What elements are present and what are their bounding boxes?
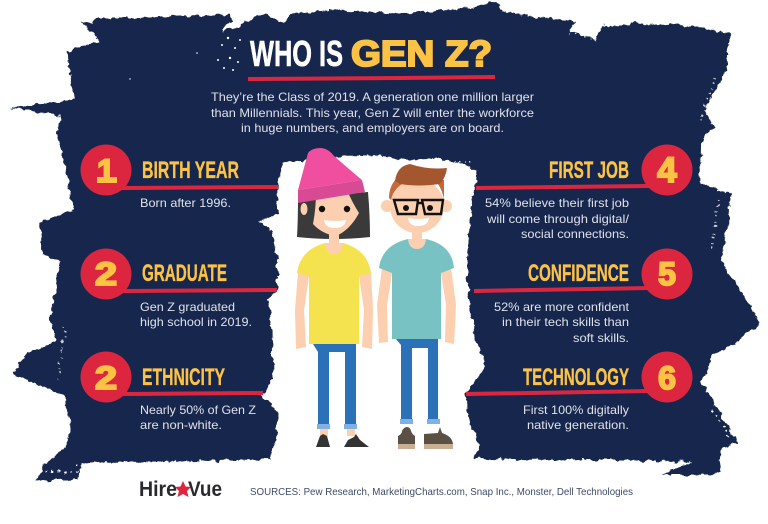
item 3: ethnicity: ETHNICITY bbox=[142, 364, 225, 391]
girl hair back bbox=[297, 192, 370, 239]
item 5: confidence: CONFIDENCE bbox=[528, 260, 629, 287]
boy neck bbox=[408, 230, 426, 249]
item 5: confidence: soft skills. bbox=[573, 331, 629, 345]
item 4: first job: will come through digital/ bbox=[486, 212, 630, 226]
boy boots bbox=[398, 427, 453, 444]
title underline bbox=[248, 75, 495, 81]
boy hair side bbox=[389, 178, 444, 200]
girl shoes bbox=[316, 434, 369, 447]
item 6: technology: native generation. bbox=[527, 418, 629, 432]
item 2: graduate: 2 bbox=[95, 256, 117, 292]
girl smile bbox=[324, 220, 346, 228]
boy glasses bbox=[394, 200, 443, 214]
item 3: ethnicity: Nearly 50% of Gen Z bbox=[140, 403, 256, 417]
item 5: confidence: in their tech skills than bbox=[502, 315, 629, 329]
item 4: first job bbox=[476, 144, 692, 241]
item 3: ethnicity: 2 bbox=[95, 360, 117, 396]
girl legs bbox=[313, 344, 356, 424]
item 5: confidence: 5 bbox=[658, 256, 676, 292]
item 1: birth year bbox=[80, 144, 278, 210]
pink hat bbox=[298, 148, 362, 190]
item 6: technology: First 100% digitally bbox=[523, 403, 629, 417]
item 2: graduate bbox=[80, 248, 277, 329]
boy hair bbox=[395, 164, 447, 186]
hirevue logo bbox=[139, 478, 222, 501]
girl face bbox=[313, 190, 359, 236]
intro paragraph: They’re the Class of 2019. A generation one million larger bbox=[211, 90, 534, 104]
boy legs bbox=[396, 339, 438, 419]
item 5: confidence bbox=[474, 248, 692, 345]
intro paragraph: than Millennials. This year, Gen Z will enter the workforce bbox=[211, 106, 534, 120]
hat band bbox=[298, 180, 365, 203]
title: gen z: GEN Z? bbox=[351, 33, 492, 74]
item 4: first job: FIRST JOB bbox=[549, 157, 629, 184]
item 1: birth year: 1 bbox=[97, 153, 115, 189]
item 4: first job: 4 bbox=[657, 151, 677, 190]
boy arms bbox=[377, 268, 456, 344]
item 3: ethnicity bbox=[80, 352, 263, 432]
item 5: confidence: 52% are more confident bbox=[494, 300, 630, 314]
boy smile bbox=[408, 218, 429, 226]
title bbox=[248, 33, 495, 81]
item 2: graduate: GRADUATE bbox=[142, 260, 227, 287]
intro paragraph bbox=[211, 90, 534, 135]
item 1: birth year: Born after 1996. bbox=[140, 196, 231, 210]
boy cuffs bbox=[400, 419, 440, 424]
item 1: birth year: BIRTH YEAR bbox=[142, 157, 239, 184]
boy shirt bbox=[379, 239, 454, 339]
girl eyes bbox=[319, 206, 325, 212]
logo star bbox=[175, 481, 191, 497]
character: girl bbox=[295, 148, 373, 447]
item 2: graduate: high school in 2019. bbox=[140, 315, 252, 329]
hirevue logo: Vue bbox=[188, 478, 222, 501]
girl ear bbox=[300, 203, 308, 215]
item 6: technology: TECHNOLOGY bbox=[523, 364, 629, 391]
intro paragraph: in huge numbers, and employers are on board. bbox=[241, 121, 504, 135]
item 4: first job: social connections. bbox=[521, 227, 629, 241]
girl shirt bbox=[297, 243, 371, 344]
sources: SOURCES: Pew Research, MarketingCharts.com, Snap Inc., Monster, Dell Technologies bbox=[250, 486, 633, 498]
boy ears bbox=[381, 200, 393, 212]
girl arms bbox=[295, 272, 373, 349]
girl cuffs and ankles bbox=[317, 424, 357, 429]
item 6: technology bbox=[466, 352, 692, 432]
boy face bbox=[390, 179, 444, 233]
character: boy bbox=[377, 164, 456, 449]
item 4: first job: 54% believe their first job bbox=[485, 196, 629, 210]
item 6: technology: 6 bbox=[658, 360, 676, 396]
white specks beside title bbox=[129, 37, 241, 80]
hirevue logo: Hire bbox=[139, 478, 177, 501]
item 3: ethnicity: are non-white. bbox=[140, 418, 222, 432]
girl neck bbox=[325, 232, 343, 254]
title: who is: WHO IS bbox=[250, 33, 343, 74]
boy eyes bbox=[403, 205, 409, 211]
item 2: graduate: Gen Z graduated bbox=[140, 300, 235, 314]
